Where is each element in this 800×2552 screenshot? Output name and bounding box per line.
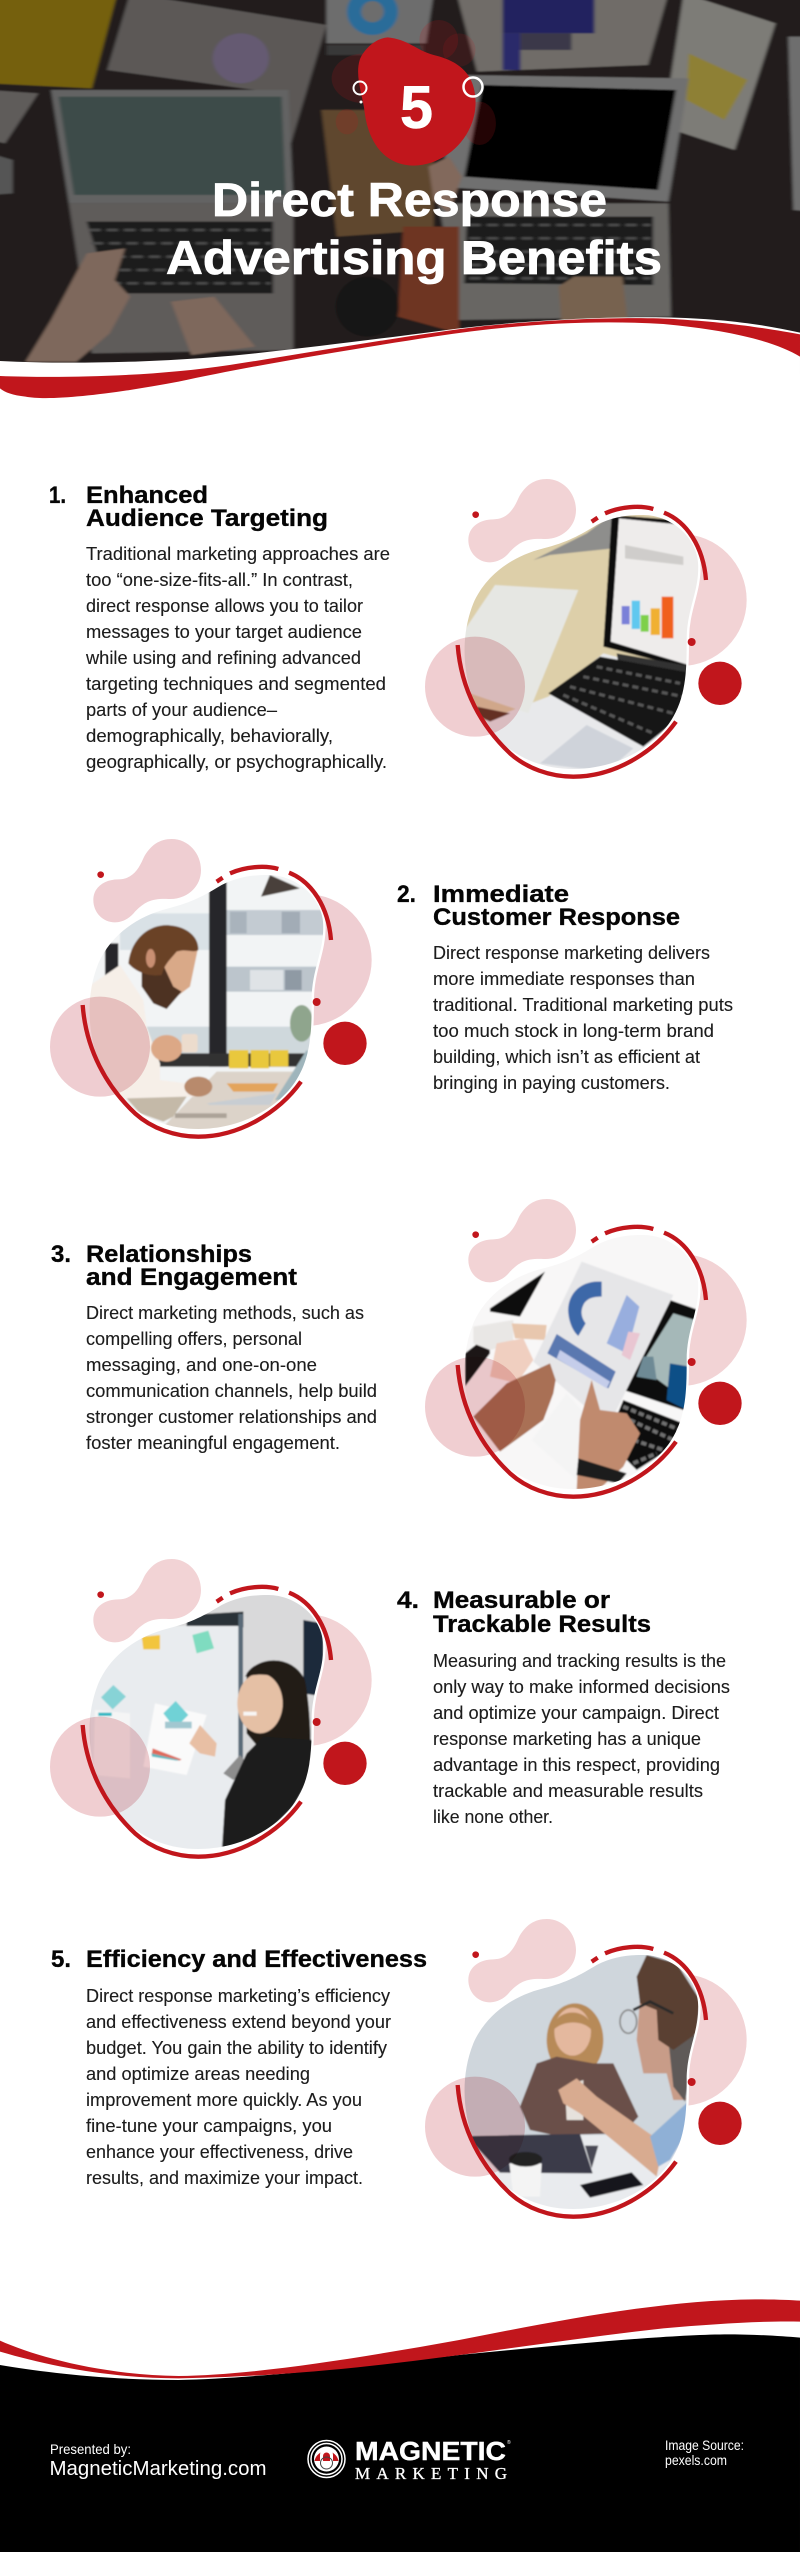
- benefit 1 body text: geographically, or psychographically.: [86, 752, 387, 772]
- benefit 4 heading: [397, 1587, 651, 1638]
- header wave: white cover: [0, 317, 800, 420]
- footer: Magnetic Marketing logo: MAGNETIC: [355, 2436, 506, 2466]
- benefit 4 heading: Measurable or: [433, 1587, 610, 1614]
- footer: Magnetic Marketing logo: [308, 2436, 511, 2483]
- benefit 1 heading: [49, 482, 328, 532]
- footer: presented by: [50, 2441, 266, 2480]
- benefit 2 body text: Direct response marketing delivers: [433, 943, 710, 963]
- benefit 2 heading: Immediate: [433, 881, 569, 908]
- footer: image source: [665, 2437, 744, 2468]
- footer: image source: pexels.com: [665, 2452, 727, 2468]
- benefit 3 body text: [86, 1303, 377, 1453]
- benefit 5 body text: fine-tune your campaigns, you: [86, 2116, 332, 2136]
- benefit 5 body text: [86, 1986, 391, 2188]
- photo: tablet and laptop with bar chart: [464, 515, 698, 769]
- benefit 2 body text: too much stock in long-term brand: [433, 1021, 714, 1041]
- benefit 1 body text: targeting techniques and segmented: [86, 674, 386, 694]
- benefit 3 body text: messaging, and one-on-one: [86, 1355, 317, 1375]
- benefit 3 body text: Direct marketing methods, such as: [86, 1303, 364, 1323]
- footer: presented by: Presented by:: [50, 2441, 131, 2457]
- benefit 4 body text: response marketing has a unique: [433, 1729, 701, 1749]
- benefit 1 body text: demographically, behaviorally,: [86, 726, 333, 746]
- benefit 1 body text: while using and refining advanced: [85, 648, 361, 668]
- benefit 5 heading: 5.: [51, 1946, 71, 1973]
- benefit 4 graphic: [50, 1559, 372, 1873]
- benefit 5 body text: and effectiveness extend beyond your: [86, 2012, 391, 2032]
- header wave: red ribbon: [0, 318, 800, 398]
- benefit 2 body text: bringing in paying customers.: [433, 1073, 670, 1093]
- benefit 1 graphic: [425, 479, 747, 783]
- benefit 1 heading: Enhanced: [86, 482, 208, 509]
- benefit 1 body text: [85, 544, 390, 772]
- benefit 3 heading: [51, 1241, 297, 1291]
- benefit 5 body text: improvement more quickly. As you: [86, 2090, 362, 2110]
- benefit 5 heading: Efficiency and Effectiveness: [86, 1946, 427, 1973]
- footer: Magnetic Marketing logo: ®: [507, 2439, 511, 2446]
- title: Advertising Benefits: [166, 231, 662, 284]
- photo: hands holding a report: [464, 1260, 696, 1489]
- benefit 3 body text: foster meaningful engagement.: [86, 1433, 340, 1453]
- benefit 1 body text: direct response allows you to tailor: [86, 596, 363, 616]
- benefit 1 heading: 1.: [49, 482, 66, 509]
- benefit 1 body text: parts of your audience–: [86, 700, 277, 720]
- benefit 3 body text: compelling offers, personal: [86, 1329, 302, 1349]
- benefit 1 body text: messages to your target audience: [86, 622, 362, 642]
- benefit 4 body text: only way to make informed decisions: [433, 1677, 730, 1697]
- benefit 3 heading: and Engagement: [86, 1264, 297, 1291]
- title: Direct Response: [212, 173, 607, 226]
- title: [166, 173, 662, 284]
- benefit 5 body text: and optimize areas needing: [86, 2064, 310, 2084]
- benefit 4 body text: Measuring and tracking results is the: [433, 1651, 726, 1671]
- benefit 2 body text: [433, 943, 733, 1093]
- benefit 5 graphic: [425, 1919, 747, 2233]
- footer: presented by: MagneticMarketing.com: [50, 2458, 266, 2480]
- benefit 3 heading: 3.: [51, 1241, 71, 1268]
- photo: two people bumping fists at a table: [464, 1955, 698, 2209]
- benefit 4 body text: and optimize your campaign. Direct: [433, 1703, 719, 1723]
- benefit 3 body text: stronger customer relationships and: [86, 1407, 377, 1427]
- benefit 2 heading: Customer Response: [433, 904, 680, 931]
- benefit 2 heading: [397, 881, 680, 931]
- benefit 3 graphic: [425, 1199, 747, 1513]
- badge: number 5 on red blob: [332, 20, 496, 166]
- benefit 1 body text: too “one-size-fits-all.” In contrast,: [86, 570, 353, 590]
- photo: man with mug at laptop: [90, 875, 324, 1129]
- benefit 4 heading: 4.: [397, 1587, 419, 1614]
- benefit 4 body text: trackable and measurable results: [433, 1781, 703, 1801]
- benefit 4 heading: Trackable Results: [433, 1611, 651, 1638]
- footer wave: red ribbon: [0, 2299, 800, 2378]
- footer: Magnetic Marketing logo: MARKETING: [355, 2464, 507, 2483]
- benefit 4 body text: advantage in this respect, providing: [433, 1755, 720, 1775]
- benefit 3 body text: communication channels, help build: [86, 1381, 377, 1401]
- benefit 5 body text: enhance your effectiveness, drive: [86, 2142, 353, 2162]
- photo: woman pointing at a whiteboard: [90, 1595, 324, 1849]
- benefit 2 body text: traditional. Traditional marketing puts: [433, 995, 733, 1015]
- benefit 5 body text: results, and maximize your impact.: [86, 2168, 363, 2188]
- benefit 3 heading: Relationships: [86, 1241, 252, 1268]
- benefit 4 body text: like none other.: [433, 1807, 553, 1827]
- benefit 5 body text: budget. You gain the ability to identify: [86, 2038, 387, 2058]
- benefit 2 graphic: [50, 839, 372, 1153]
- benefit 1 heading: Audience Targeting: [86, 505, 328, 532]
- footer black panel: [0, 2334, 800, 2552]
- badge: number 5 on red blob: 5: [400, 74, 433, 141]
- benefit 1 body text: Traditional marketing approaches are: [86, 544, 390, 564]
- footer: image source: Image Source:: [665, 2437, 744, 2453]
- benefit 2 body text: more immediate responses than: [433, 969, 695, 989]
- benefit 5 body text: Direct response marketing’s efficiency: [86, 1986, 390, 2006]
- icon: magnet in concentric rings: [308, 2440, 345, 2478]
- benefit 2 body text: building, which isn’t as efficient at: [433, 1047, 700, 1067]
- benefit 4 body text: [433, 1651, 730, 1827]
- benefit 2 heading: 2.: [397, 881, 416, 908]
- header photo: laptops on a desk: [0, 0, 800, 373]
